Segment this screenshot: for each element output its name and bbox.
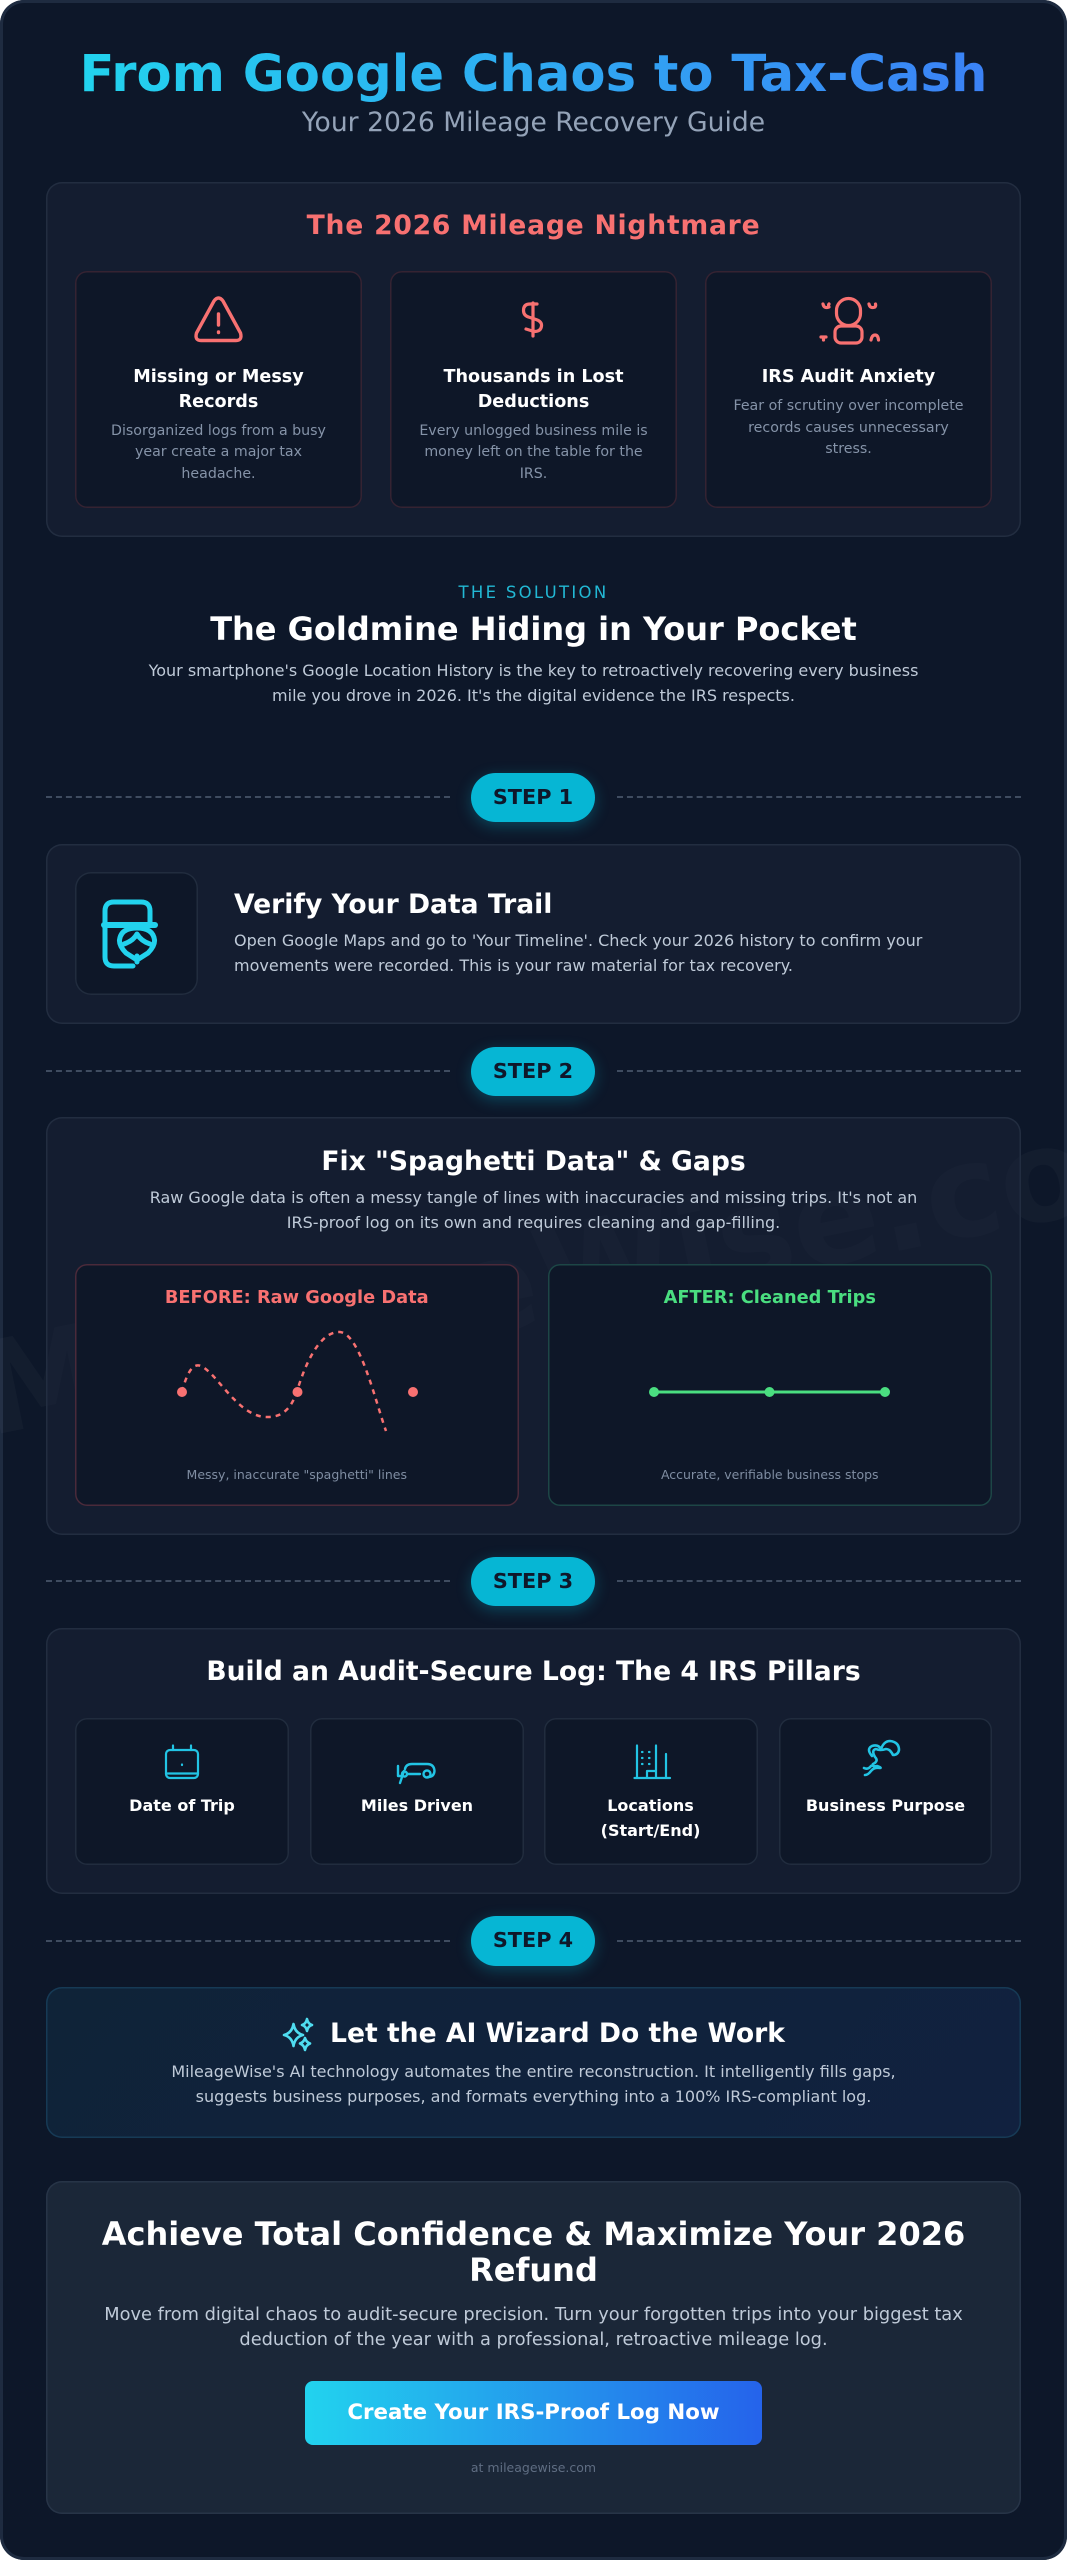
card text: records causes unnecessary [748,420,949,436]
step 2 text: Raw Google data is often a messy tangle of lines with inaccuracies and missing trips. It's not an [150,1188,917,1207]
pillar label: Business Purpose [806,1796,965,1815]
pillar: locations [544,1718,758,1865]
icon: sparkles [282,2018,314,2052]
icon: dollar [522,301,544,338]
heading: nightmare: The 2026 Mileage Nightmare [307,210,760,241]
panel: mileage nightmare [46,182,1021,537]
icon: phone with pin [75,872,198,995]
icon: warning triangle [194,296,243,342]
card: audit anxiety [705,271,992,508]
eyebrow label: THE SOLUTION [459,583,608,602]
panel: verify data trail [46,844,1021,1024]
CTA button [305,2381,762,2445]
step 4 heading: Let the AI Wizard Do the Work [330,2018,785,2048]
solution text: mile you drove in 2026. It's the digital evidence the IRS respects. [272,686,795,705]
card text: Disorganized logs from a busy [111,423,326,439]
card heading: IRS Audit Anxiety [762,367,935,387]
pillar label: (Start/End) [601,1821,700,1840]
card text: money left on the table for the [424,444,643,460]
step 2 heading: Fix "Spaghetti Data" & Gaps [321,1146,746,1177]
step 4 text: suggests business purposes, and formats everything into a 100% IRS-compliant log. [196,2087,871,2106]
subtitle: Your 2026 Mileage Recovery Guide [302,107,765,138]
card text: Fear of scrutiny over incomplete [733,398,964,414]
step 4 text [171,2062,896,2106]
step 4 badge: STEP 4 [493,1928,573,1952]
before heading: BEFORE: Raw Google Data [165,1287,429,1308]
pillar: purpose [779,1718,992,1865]
site link: at mileagewise.com [471,2460,596,2475]
step 3 heading: Build an Audit-Secure Log: The 4 IRS Pillars [206,1656,861,1687]
step 1 text: movements were recorded. This is your raw material for tax recovery. [234,956,793,975]
step 2 text: IRS-proof log on its own and requires cleaning and gap-filling. [287,1213,780,1232]
header [80,44,987,138]
step 3 badge: STEP 3 [493,1569,573,1593]
card heading [133,367,304,412]
step 2 text [150,1188,917,1232]
title: From Google Chaos to Tax-Cash [80,44,987,104]
panel: after [548,1264,992,1506]
solution text [148,661,918,705]
solution heading: The Goldmine Hiding in Your Pocket [210,610,857,648]
card: lost deductions [390,271,677,508]
card text [733,398,964,457]
step 1 text: Open Google Maps and go to 'Your Timeline'. Check your 2026 history to confirm your [234,931,922,950]
icon: briefcase squiggle [862,1740,900,1776]
step 4 text: MileageWise's AI technology automates the entire reconstruction. It intelligently fills gaps, [171,2062,896,2081]
panel: before [75,1264,518,1506]
CTA heading: Achieve Total Confidence & Maximize Your 2026 [102,2215,965,2253]
icon: anxious person [819,296,880,345]
card heading [443,367,624,412]
card heading: Deductions [478,392,589,412]
solution text: Your smartphone's Google Location History is the key to retroactively recovering every business [149,661,918,680]
card: missing records [75,271,362,508]
after heading: AFTER: Cleaned Trips [664,1287,876,1308]
chart: messy route [177,1330,418,1432]
CTA text [104,2304,963,2350]
CTA heading: Refund [469,2251,598,2289]
panel: spaghetti data [46,1117,1021,1535]
before caption: Messy, inaccurate "spaghetti" lines [187,1467,407,1482]
after caption: Accurate, verifiable business stops [661,1467,879,1482]
card heading: Records [179,392,258,412]
CTA text: Move from digital chaos to audit-secure precision. Turn your forgotten trips into your biggest tax [104,2304,963,2325]
card text: IRS. [520,466,547,482]
panel: AI wizard [46,1987,1021,2138]
card text: year create a major tax [135,444,302,460]
icon: calendar [164,1744,200,1780]
pillar label: Date of Trip [129,1796,235,1815]
card text: Every unlogged business mile is [419,423,648,439]
card text: headache. [181,466,256,482]
pillar label: Locations [607,1796,694,1815]
pillar: miles [310,1718,524,1865]
card text [419,423,648,482]
solution section [148,583,918,705]
step 1 badge: STEP 1 [493,784,573,808]
CTA heading [102,2215,965,2289]
pillar label [601,1796,700,1840]
step 2 badge: STEP 2 [493,1058,573,1082]
card heading: Missing or Messy [133,367,304,387]
card text: stress. [825,441,872,457]
panel: call to action [46,2181,1021,2514]
icon: building [633,1744,672,1780]
card heading: Thousands in Lost [443,367,624,387]
card text [111,423,326,482]
step 1 text [234,931,922,975]
step 1 heading: Verify Your Data Trail [234,889,552,920]
pillar: date [75,1718,289,1865]
CTA text: deduction of the year with a professional, retroactive mileage log. [239,2329,828,2350]
icon: car [396,1762,436,1784]
panel: four pillars [46,1628,1021,1894]
pillar label: Miles Driven [361,1796,473,1815]
CTA button: Create Your IRS-Proof Log Now [347,2400,720,2425]
chart: clean route [649,1387,890,1397]
